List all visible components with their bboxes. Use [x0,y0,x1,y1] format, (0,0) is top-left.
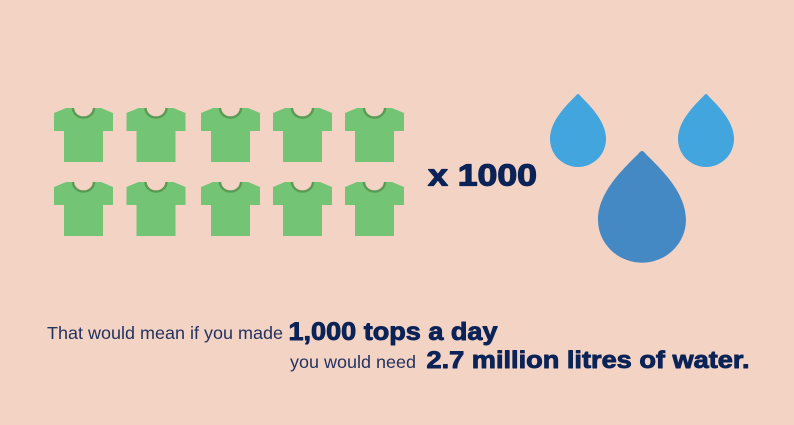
icon: t-shirt row 1 col 3 [201,108,260,162]
caption line 2 lead-in: you would need [290,352,416,372]
icon: small water drop right [678,94,734,167]
caption line 2 emphasis: 2.7 million litres of water. [426,347,750,374]
icon: large water drop [598,151,686,263]
icon: t-shirt row 1 col 4 [273,108,332,162]
icon: t-shirt row 2 col 2 [126,182,186,236]
caption line 1 emphasis: 1,000 tops a day [288,318,498,346]
icon: t-shirt row 1 col 2 [126,108,186,162]
icon: t-shirt row 1 col 5 [345,108,404,162]
caption text [47,318,750,374]
t-shirt grid [54,108,404,236]
icon: t-shirt row 2 col 1 [54,182,113,236]
icon: small water drop left [550,94,606,167]
icon: t-shirt row 1 col 1 [54,108,113,162]
icon: t-shirt row 2 col 5 [345,182,404,236]
icon: t-shirt row 2 col 3 [201,182,260,236]
icon: t-shirt row 2 col 4 [273,182,332,236]
multiplier label: x 1000 [428,158,537,192]
caption line 1 lead-in: That would mean if you made [47,323,283,343]
